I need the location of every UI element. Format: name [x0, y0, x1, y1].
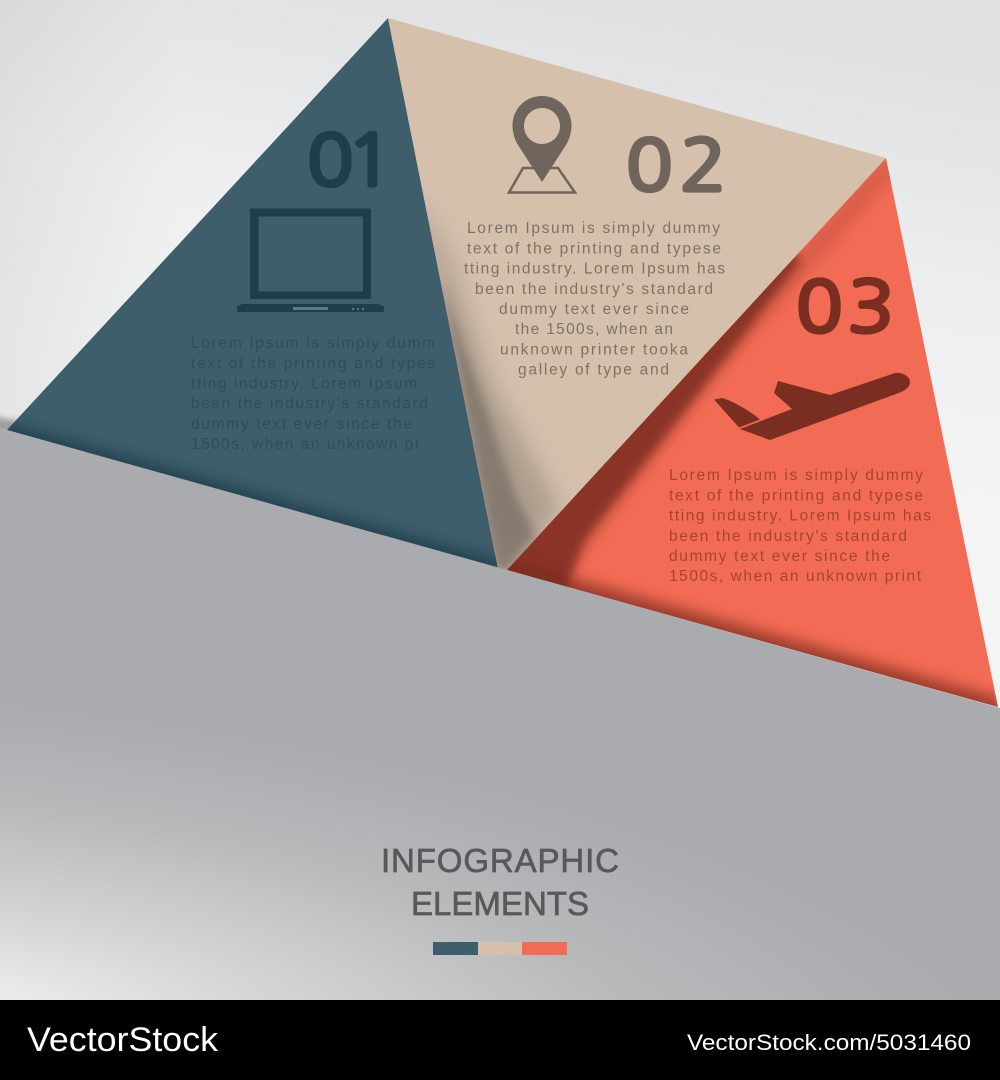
panel 03: red triangle — [480, 158, 1000, 725]
icon: map pin — [509, 96, 575, 192]
footer band — [0, 1000, 1000, 1080]
text block 03: Lorem Ipsum is simply dummy — [669, 467, 923, 484]
text block 02 — [464, 220, 725, 378]
text block 02: been the industry's standard — [475, 281, 713, 298]
text block 02: tting industry. Lorem Ipsum has — [464, 261, 725, 278]
text block 03: been the industry's standard — [669, 528, 907, 545]
title — [381, 842, 619, 922]
panel 02: beige quadrilateral — [388, 18, 886, 575]
footer brand: VectorStock — [27, 1021, 219, 1059]
text block 01: been the industry's standard — [191, 396, 428, 413]
title: INFOGRAPHIC — [381, 842, 619, 879]
text block 03: text of the printing and typese — [669, 488, 923, 504]
text block 02: Lorem Ipsum is simply dummy — [467, 220, 720, 237]
text block 03 — [669, 467, 931, 585]
text block 01: dummy text ever since the — [191, 416, 412, 433]
text block 01: Lorem Ipsum is simply dumm — [191, 335, 435, 352]
number 03: 03 — [796, 272, 894, 342]
text block 02: galley of type and — [518, 362, 669, 378]
panel 01: blue triangle — [0, 18, 500, 585]
text block 01: text of the printing and types — [191, 356, 435, 372]
footer url: VectorStock.com/5031460 — [687, 1030, 971, 1055]
panel: grey lower sheet — [0, 428, 1000, 1000]
text block 02: text of the printing and typese — [467, 240, 721, 258]
icon: airplane — [714, 373, 910, 440]
text block 03: tting industry. Lorem Ipsum has — [669, 508, 931, 524]
icon: laptop — [237, 208, 384, 312]
title: ELEMENTS — [411, 885, 589, 922]
text block 01 — [191, 335, 435, 453]
text block 02: dummy text ever since — [499, 301, 689, 318]
number 02: 02 — [626, 131, 727, 201]
colour legend bar — [433, 942, 567, 955]
number 01: 01 — [307, 126, 393, 196]
text block 03: dummy text ever since the — [669, 548, 890, 565]
text block 02: the 1500s, when an — [515, 321, 673, 338]
text block 02: unknown printer tooka — [500, 342, 688, 358]
page background — [0, 0, 1000, 708]
text block 01: tting industry. Lorem Ipsum — [191, 376, 417, 392]
text block 03: 1500s, when an unknown print — [669, 568, 922, 585]
text block 01: 1500s, when an unknown pr — [191, 436, 420, 453]
